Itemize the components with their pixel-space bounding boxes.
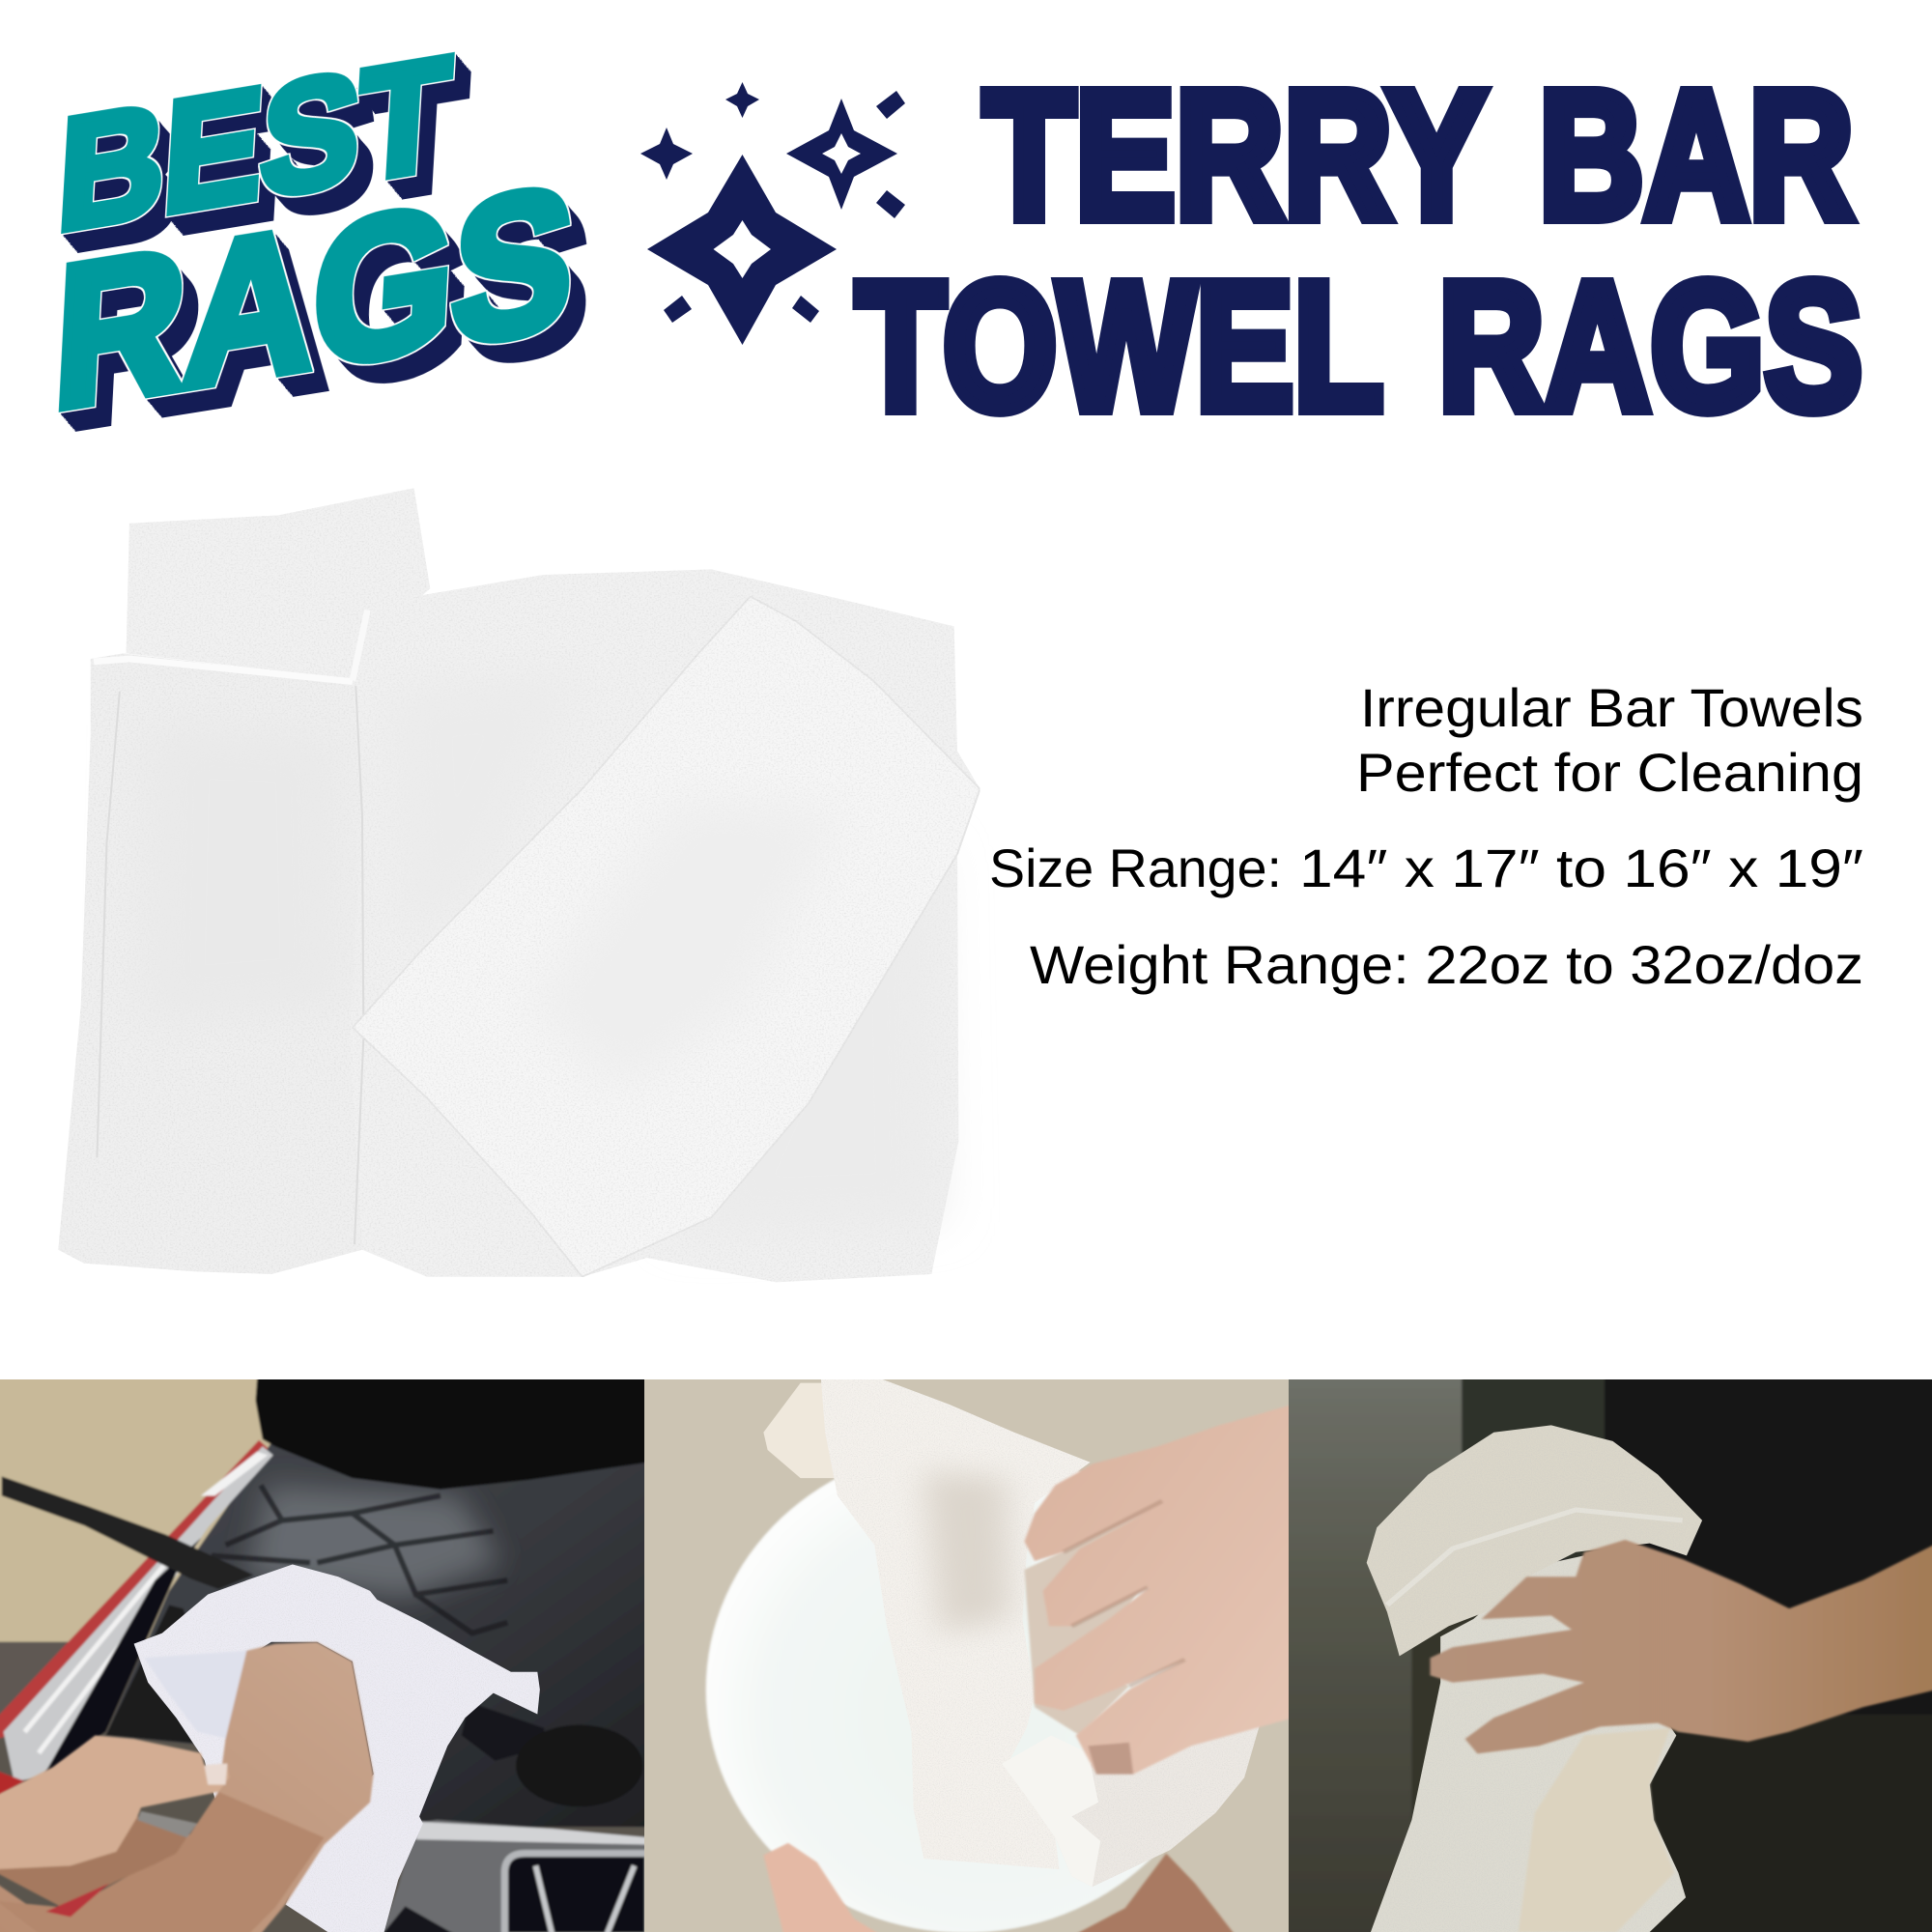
hand <box>1024 1405 1293 1775</box>
towel: middle flat <box>350 569 980 1282</box>
logo word: BEST: BEST <box>54 23 454 264</box>
towel shading and folds <box>94 611 938 1244</box>
roof spoiler <box>255 1376 648 1490</box>
title <box>856 54 1862 448</box>
description line 2: Perfect for Cleaning <box>1356 742 1863 803</box>
description line 1: Irregular Bar Towels <box>1360 677 1863 738</box>
photo: wiping car window <box>0 1376 648 1932</box>
car trim <box>0 1440 268 1739</box>
size range <box>989 838 1863 898</box>
icon: sparkles <box>640 82 905 345</box>
towel <box>1367 1425 1702 1932</box>
car glass <box>105 1443 648 1827</box>
logo: Best Rags <box>50 23 579 451</box>
photo: holding towel <box>1285 1376 1932 1932</box>
product photo: stacked bar towels <box>58 488 980 1282</box>
hand <box>1431 1540 1932 1753</box>
photo: cleaning a bowl <box>640 1376 1293 1932</box>
towel top fold shading <box>530 800 840 1093</box>
wiper <box>2 1476 254 1589</box>
car grille <box>381 1820 648 1932</box>
title line 2: TOWEL <box>856 245 1383 448</box>
arm and hand <box>0 1642 374 1932</box>
title line 1: BAR <box>1539 54 1854 257</box>
text block: product details <box>989 677 1863 995</box>
size range: Size Range: <box>989 838 1282 898</box>
logo word: RAGS: RAGS <box>50 144 579 451</box>
lower hands <box>763 1843 883 1932</box>
left hand <box>0 1816 186 1908</box>
weight range: Weight Range: 22oz to 32oz/doz <box>1030 934 1863 995</box>
towel <box>763 1379 1261 1887</box>
towel: left folded <box>58 488 430 1274</box>
bowl <box>704 1470 1177 1932</box>
towel on hand <box>134 1565 540 1932</box>
title line 2 <box>856 245 1862 448</box>
size range: 14″ x 17″ to 16″ x 19″ <box>1299 838 1863 898</box>
towel: top folded <box>353 596 980 1277</box>
photo strip <box>0 1376 1932 1932</box>
title line 1: TERRY <box>983 54 1487 257</box>
